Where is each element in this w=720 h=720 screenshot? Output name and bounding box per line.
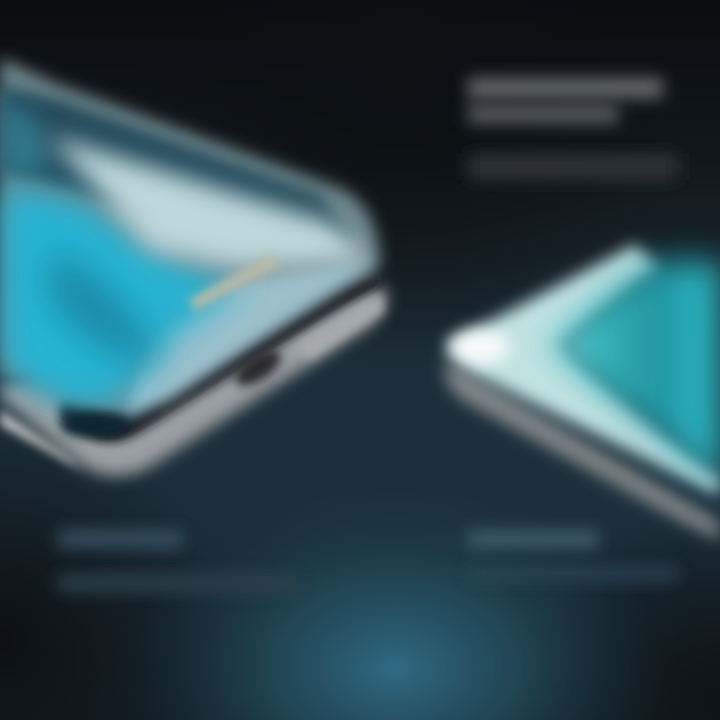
phone left: screen deep swoosh: [50, 250, 160, 361]
phone left: lower glass blue grey: [120, 262, 375, 420]
caption right: [468, 530, 678, 580]
caption left body: [58, 574, 298, 592]
phone left: frame left highlight: [0, 410, 82, 470]
phone left: bottom notch shadow: [61, 412, 129, 438]
phone right: frame: [445, 360, 720, 540]
caption right body: [468, 567, 678, 580]
phone left: button dark: [230, 344, 286, 392]
phone left: light reflection: [48, 135, 372, 268]
phone left: screen cyan: [0, 185, 240, 405]
caption left: [58, 530, 298, 592]
subheading: [468, 154, 678, 180]
phone left: orange highlight: [188, 254, 280, 310]
heading line one: [468, 78, 663, 98]
phone left: frame bright segment: [295, 295, 384, 360]
phone right: screen: [540, 262, 720, 482]
caption left title: [58, 530, 183, 548]
heading line two: [468, 104, 618, 124]
phone left: [0, 58, 386, 476]
phone left: dark edge band: [60, 268, 382, 441]
phone right: [445, 245, 720, 540]
phone left: inner dark glass: [0, 85, 350, 240]
phone right: glass: [445, 245, 720, 495]
phone left: metal frame: [0, 285, 386, 476]
phone left: glass rim: [0, 58, 378, 420]
phone left: corner cyan: [0, 95, 50, 175]
caption right title: [468, 530, 598, 548]
heading placeholder: [468, 78, 678, 180]
phone right: white corner: [450, 330, 510, 364]
